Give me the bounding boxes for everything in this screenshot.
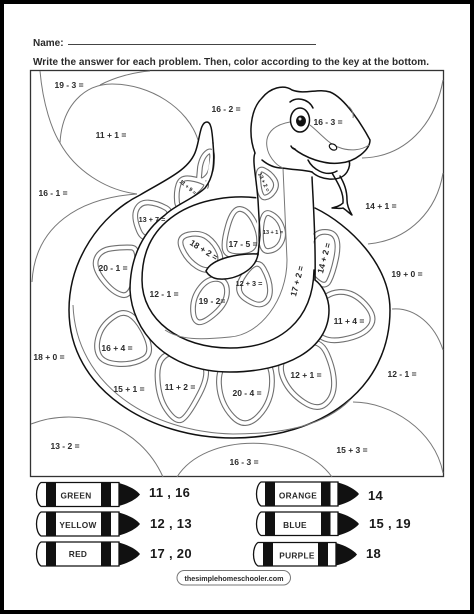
- math problems: 19 - 3 =: [54, 80, 84, 90]
- math problems: 18 + 2 =: [188, 237, 220, 263]
- math problems: 19 + 0 =: [391, 269, 423, 279]
- math problems: 17 - 5 =: [228, 239, 258, 249]
- belly line: [165, 168, 287, 339]
- eye: [290, 108, 310, 132]
- website pill: thesimplehomeschooler.com: [184, 574, 284, 583]
- math problems: 13 - 2 =: [50, 441, 80, 451]
- math problems: 12 - 1 =: [387, 369, 417, 379]
- math problems: 15 + 3 =: [336, 445, 368, 455]
- math problems: 11 + 4 =: [334, 316, 364, 326]
- math problems: 20 - 4 =: [232, 388, 262, 398]
- crayon key: orange: ORANGE: [279, 490, 317, 500]
- crayon key: yellow: YELLOW: [59, 520, 97, 530]
- math problems: 13 + 1 =: [263, 230, 283, 236]
- math problems: 20 - 1 =: [98, 263, 128, 273]
- math problems: 16 - 1 =: [38, 188, 68, 198]
- crayon key: orange: [256, 482, 359, 506]
- key numbers: yellow: 12 , 13: [150, 516, 192, 531]
- brow: [290, 99, 313, 108]
- math problems: 13 + 2 =: [256, 172, 270, 193]
- key numbers: red: 17 , 20: [150, 546, 192, 561]
- math problems: 14 + 2 =: [315, 242, 333, 274]
- crayon key: blue: BLUE: [283, 520, 307, 530]
- coil end: [206, 254, 258, 279]
- math problems: 11 + 2 =: [165, 382, 195, 392]
- math problems: 12 - 1 =: [149, 289, 179, 299]
- name line: Name:: [33, 38, 64, 49]
- math problems: 11 + 1 =: [96, 130, 126, 140]
- math problems: 19 - 2=: [199, 296, 225, 306]
- key numbers: blue: 15 , 19: [369, 516, 411, 531]
- math problems: 12 + 3 =: [236, 279, 262, 288]
- background curves: [31, 71, 443, 477]
- head bump: [348, 106, 353, 118]
- neck: [255, 148, 314, 262]
- outer petals: [96, 151, 373, 423]
- math problems: 17 + 2 =: [288, 265, 306, 297]
- nostril: [328, 143, 338, 151]
- neck petals: [258, 170, 283, 251]
- math problems: 14 + 1 =: [365, 201, 397, 211]
- crayon key: green: GREEN: [60, 490, 92, 500]
- crayon key: purple: [254, 542, 357, 566]
- crayon key: purple: PURPLE: [279, 550, 315, 560]
- neck outlines: [254, 153, 315, 280]
- crayon key: yellow: [36, 512, 140, 536]
- mouth and jaw: [291, 146, 350, 179]
- crayon key: red: [36, 542, 140, 566]
- instructions: Write the answer for each problem. Then, color according to the key at the bottom.: [33, 57, 429, 68]
- math problems: 16 - 3 =: [313, 117, 343, 127]
- math problems: [33, 80, 423, 467]
- tongue: [332, 173, 352, 215]
- picture frame: [30, 70, 444, 477]
- inner coil: [142, 197, 314, 348]
- upper coil: [130, 143, 329, 372]
- math problems: 11 + 9 =: [178, 179, 197, 196]
- crayon key: red: RED: [69, 549, 87, 559]
- math problems: 13 + 7 =: [139, 215, 165, 224]
- math problems: 16 - 2 =: [211, 104, 241, 114]
- head: [251, 87, 370, 179]
- key numbers: orange: 14: [368, 488, 384, 503]
- math problems: 15 + 1 =: [113, 384, 145, 394]
- inner petals: [180, 209, 270, 322]
- snake illustration: [69, 87, 390, 438]
- math problems: 18 + 0 =: [33, 352, 65, 362]
- math problems: 12 + 1 =: [290, 370, 322, 380]
- key numbers: purple: 18: [366, 546, 381, 561]
- crayon key: blue: [256, 512, 359, 536]
- math problems: 16 + 4 =: [101, 343, 133, 353]
- key numbers: green: 11 , 16: [149, 485, 190, 500]
- snake body outer coil and tail: [69, 122, 390, 438]
- crayon key: green: [36, 482, 140, 506]
- website pill: [177, 570, 290, 585]
- math problems: 16 - 3 =: [229, 457, 259, 467]
